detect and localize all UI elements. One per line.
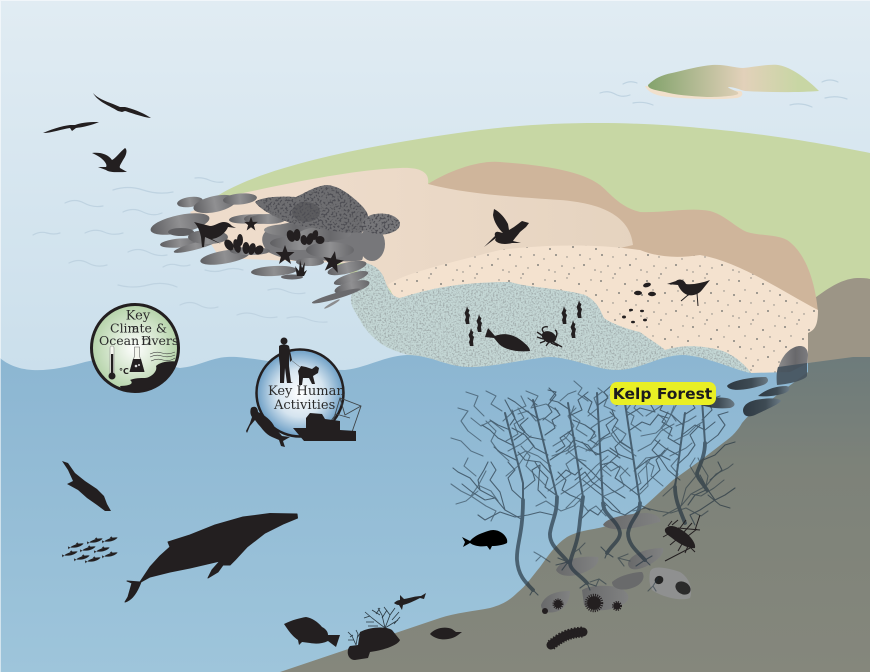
badge title [268,384,345,413]
surface wave lines [33,80,847,322]
wave lines [150,352,175,361]
dune slope [420,162,818,312]
degrees label: °C [119,367,129,376]
badge title: Ocean [99,333,139,348]
dotted sand [388,245,818,376]
sand tracks [622,282,656,323]
gravel fish [485,328,530,351]
fishing boat [293,413,356,441]
leash [291,360,300,367]
person [279,338,293,383]
green hillside [205,123,870,300]
sea floor [280,357,870,672]
gravel shore [351,262,752,385]
badge title: Activities [273,398,335,413]
diver [246,407,290,447]
net rigging [328,398,361,432]
seabirds [43,93,151,172]
badge title: Key [126,308,151,324]
spiny lobster [663,515,700,561]
upper beach [190,168,633,300]
seafloor rocks [541,513,693,613]
crab [537,327,562,347]
pelican [484,209,529,247]
badge title [99,308,178,348]
badge title: D [141,333,151,348]
island [645,65,819,99]
badge title: ate & [132,320,167,336]
small shark [394,593,426,610]
sea cucumber [551,632,583,645]
sea urchins [542,596,620,614]
gravel seaweed [464,300,582,346]
badge: Key Human Activities [246,338,361,447]
rockfish [284,617,340,647]
label: Kelp Forest: Kelp Forest [613,385,713,403]
sky background [0,0,870,400]
speckled boulders [255,185,400,234]
black fish [462,530,507,550]
badge title: Clim [110,320,139,336]
dog [298,366,319,385]
dolphin [62,461,111,511]
submerged shore rocks [695,377,789,416]
grey cliff [808,278,870,380]
big shoreline rock [777,346,808,385]
badge wave [120,361,175,390]
tidepool rocks [149,192,385,310]
thermometer [108,346,116,380]
tidepool seaweed [295,260,307,276]
water body [0,355,870,672]
dark reef with corals [348,607,400,660]
flatfish [430,628,462,639]
badge: Key Climate & Ocean Drivers [92,304,180,396]
humpback whale [125,514,298,602]
badge title: rivers [142,333,178,348]
shorebird [667,280,710,306]
tidepool bird [194,222,236,247]
flask [130,347,144,372]
fish school [61,535,118,563]
kelp forest [451,381,735,595]
big rock submerged part [777,363,807,385]
mussels [222,229,324,256]
badge title: Key Human [268,384,345,399]
sea stars [244,217,345,274]
